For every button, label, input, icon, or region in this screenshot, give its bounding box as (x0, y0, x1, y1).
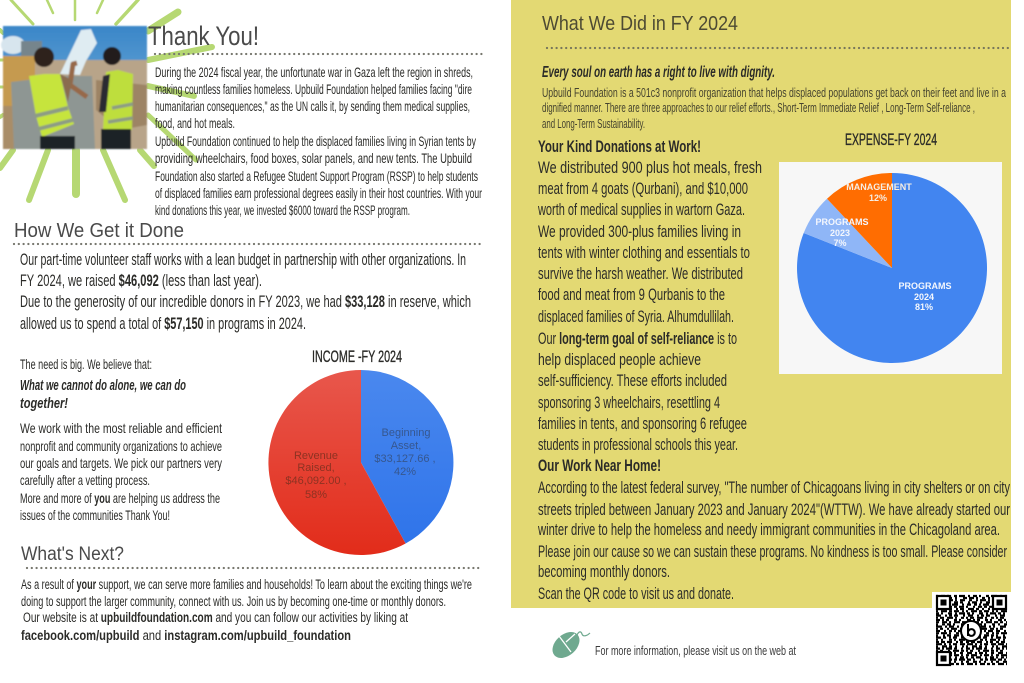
text block: thank you message: providing wheelchairs, food boxes, solar panels, and new tents. The Upbuild (155, 150, 472, 166)
photo: volunteers in green vests with a water tank (1, 26, 147, 149)
pie chart: expense FY 2024: 12% (869, 193, 887, 203)
text block: your kind donations at work: survive the harsh weather. We distributed (538, 264, 743, 283)
text block: your kind donations at work: self-sufficiency. These efforts included (538, 371, 727, 390)
text block: thank you message: making countless families homeless. Upbuild Foundation helped families facing "dire (155, 81, 472, 97)
text block: your kind donations at work: sponsoring 3 wheelchairs, resettling 4 (538, 393, 720, 412)
text block: what's next: doing to support the larger community, connect with us. Join us by becoming one-time or monthly donors. (21, 594, 446, 609)
pie chart: income FY 2024: Beginning (382, 427, 430, 439)
text block: your kind donations at work: tents with winter clothing and essentials to (538, 243, 750, 262)
text block: the need is big: We work with the most reliable and efficient (20, 420, 222, 436)
text block: your kind donations at work: help displaced people achieve (538, 350, 701, 369)
text block: thank you message: humanitarian consequences," as the UN calls it, by sending them medical supplies, (155, 98, 470, 114)
heading: What's Next?: What's Next? (21, 544, 124, 565)
pie chart: income FY 2024 (268, 370, 453, 555)
divider (14, 243, 484, 245)
text block: how we get it done: Our part-time volunteer staff works with a lean budget in partnership with other organizations. In (20, 250, 466, 269)
pie chart: expense FY 2024: 2023 (830, 228, 850, 238)
text block: the need is big (20, 356, 222, 523)
pie chart: income FY 2024: 58% (305, 489, 327, 501)
text block: your kind donations at work: meat from 4 goats (Qurbani), and $10,000 (538, 179, 748, 198)
heading: Thank You!: Thank You! (148, 21, 259, 51)
divider (547, 47, 1010, 49)
pie chart: income FY 2024: $46,092.00 , (285, 475, 347, 487)
text block: what's next: Our website is at upbuildfoundation.com and you can follow our activities by liking at (23, 610, 408, 625)
pie chart: income FY 2024: Revenue (294, 450, 338, 462)
text block: the need is big: carefully after a vetting process. (20, 472, 150, 488)
text block: how we get it done: allowed us to spend a total of $57,150 in programs in 2024. (20, 314, 306, 333)
pie chart: expense FY 2024: PROGRAMS (898, 281, 952, 291)
divider (27, 567, 480, 569)
pie chart: income FY 2024: Asset, (391, 440, 421, 452)
text block: thank you message: Foundation also started a Refugee Student Support Program (RSSP) to help students (155, 168, 478, 184)
text block: the need is big: our goals and targets. We pick our partners very (20, 455, 222, 471)
text block: your kind donations at work: students in professional schools this year. (538, 435, 738, 454)
text block: mission statement: Every soul on earth has a right to live with dignity. (542, 64, 775, 81)
text block: your kind donations at work: food and meat from 9 Qurbanis to the (538, 285, 725, 304)
text block: what's next: As a result of your support, we can serve more families and households! To learn about the exciting things we're (21, 577, 472, 592)
pie chart: expense FY 2024: MANAGEMENT (846, 182, 912, 192)
text block: your kind donations at work: displaced families of Syria. Alhumdullilah. (538, 307, 734, 326)
pie chart: expense FY 2024: 2024 (914, 292, 934, 302)
chart title: expense: EXPENSE-FY 2024 (845, 130, 937, 149)
text block: the need is big: What we cannot do alone, we can do (20, 378, 186, 394)
text block: the need is big: The need is big. We believe that: (20, 356, 152, 372)
text block: your kind donations at work: Your Kind Donations at Work! (538, 137, 701, 156)
text: web information: For more information, please visit us on the web at (595, 643, 796, 658)
heading: What We Did in FY 2024: What We Did in FY 2024 (542, 12, 738, 35)
text block: how we get it done: FY 2024, we raised $46,092 (less than last year). (20, 271, 262, 290)
text block: your kind donations at work: worth of medical supplies in wartorn Gaza. (537, 200, 745, 219)
pie chart: expense FY 2024: 7% (833, 238, 847, 248)
text block: what's next: facebook.com/upbuild and instagram.com/upbuild_foundation (21, 628, 351, 643)
text block: mission statement: and Long-Term Sustainability. (542, 116, 645, 131)
chart title: income: INCOME -FY 2024 (312, 347, 402, 366)
text block: thank you message: of displaced families earn professional degrees easily in their host countries. With your (155, 185, 482, 201)
text block: what's next (21, 577, 472, 643)
text block: how we get it done (20, 250, 471, 333)
decorative green sunburst rays (0, 0, 212, 200)
text block: the need is big: together! (20, 396, 68, 412)
text block: our work near home: Our Work Near Home! (538, 456, 661, 475)
text block: thank you message: During the 2024 fiscal year, the unfortunate war in Gaza left the region in shreds, (155, 64, 473, 80)
text block: thank you message (155, 64, 482, 218)
text block: the need is big: issues of the communities Thank You! (20, 507, 170, 523)
text block: our work near home: becoming monthly donors. (538, 562, 670, 581)
pie chart: expense FY 2024: 81% (915, 302, 933, 312)
pie chart: expense FY 2024: PROGRAMS (815, 217, 869, 227)
pie chart: expense FY 2024 (779, 162, 1002, 374)
text block: thank you message: kind donations this year, we invested $6000 toward the RSSP program. (155, 202, 410, 218)
text block: thank you message: Upbuild Foundation continued to help the displaced families living in Syrian tents by (155, 133, 476, 149)
text block: your kind donations at work: families in tents, and sponsoring 6 refugee (538, 414, 747, 433)
text block: thank you message: food, and hot meals. (155, 115, 235, 131)
icon: computer mouse (547, 627, 590, 663)
pie chart: income FY 2024: 42% (394, 466, 416, 478)
pie chart: income FY 2024: Raised, (297, 462, 335, 474)
text block: our work near home: Scan the QR code to visit us and donate. (538, 584, 734, 603)
QR code (932, 592, 1014, 670)
text block: how we get it done: Due to the generosity of our incredible donors in FY 2023, we had $33,128 in reserve, which (20, 292, 471, 311)
text block: your kind donations at work: We distributed 900 plus hot meals, fresh (538, 158, 762, 177)
heading: How We Get it Done: How We Get it Done (14, 220, 184, 242)
text block: the need is big: More and more of you are helping us address the (20, 490, 220, 506)
text block: your kind donations at work: Our long-term goal of self-reliance is to (538, 329, 737, 348)
text block: the need is big: nonprofit and community organizations to achieve (20, 438, 222, 454)
text block: mission statement (542, 64, 1007, 131)
text block: your kind donations at work (537, 137, 762, 454)
panel: yellow right page background (511, 0, 1011, 608)
text block: our work near home (537, 456, 1010, 603)
text block: your kind donations at work: We provided 300-plus families living in (538, 222, 741, 241)
divider (155, 53, 484, 55)
pie chart: income FY 2024: $33,127.66 , (374, 453, 436, 465)
